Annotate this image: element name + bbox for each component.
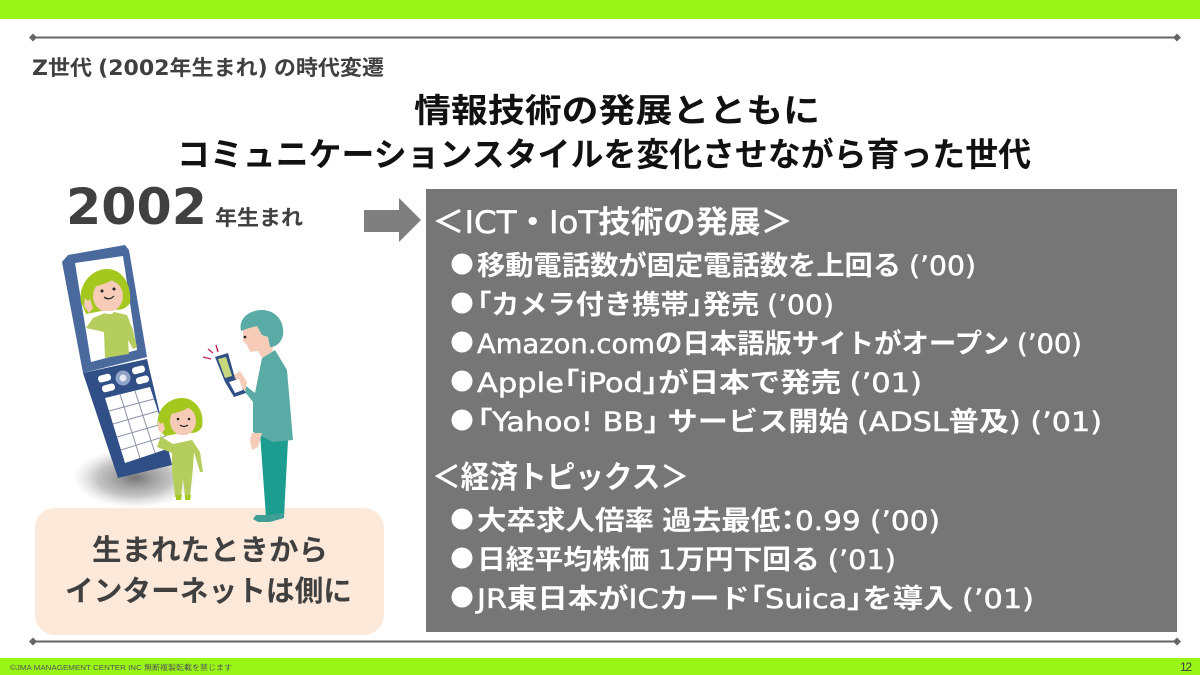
- top green bar: [0, 0, 1200, 19]
- section: ICT / IoT: Amazon.comの日本語版サイトがオープン (’00): [477, 328, 1082, 360]
- large flip phone: [62, 245, 172, 478]
- section: economy topics: 日経平均株価 1万円下回る (’01): [477, 545, 896, 576]
- section: economy topics: JR東日本が ICカード 「Suica 」を導入 (’01): [475, 583, 1034, 615]
- callout: born with the internet: インターネットは側に: [65, 575, 352, 608]
- callout: born with the internet: 生まれたときから: [92, 534, 328, 567]
- section: ICT / IoT: 移動電話数が固定電話数を上回る (’00): [477, 250, 976, 282]
- section: economy topics: ＜経済トピックス＞: [432, 460, 689, 495]
- copyright text: ©JMA MANAGEMENT CENTER INC 無断複製転載を禁じます: [10, 662, 232, 672]
- man holding phone: [233, 310, 293, 522]
- subheading: Z世代 (2002年生まれ) の時代変遷: [32, 56, 384, 80]
- section: ICT / IoT: 「カメラ付き携帯 」発売 (’00): [477, 290, 834, 321]
- title: 情報技術の発展とともに: [414, 92, 820, 129]
- birth year label: 2002: [66, 178, 207, 236]
- small phone in hand: [203, 345, 246, 397]
- panel: ICT and economy timeline: [426, 189, 1177, 632]
- bottom footer bar: [0, 658, 1200, 675]
- callout: born with the internet: [35, 508, 384, 635]
- section: ICT / IoT: Apple 「iPod 」が日本で発売 (’01): [477, 367, 922, 399]
- girl on phone screen: [81, 269, 137, 358]
- birth year label: [66, 178, 303, 236]
- section: economy topics: [432, 460, 1034, 615]
- title: コミュニケーションスタイルを変化させながら育った世代: [177, 136, 1031, 173]
- section: ICT / IoT: [432, 205, 1102, 438]
- phone shadow: [73, 448, 197, 508]
- illustration: flip phone with girl and man: [62, 245, 293, 522]
- title: [177, 92, 1031, 173]
- section: ICT / IoT: 「Yahoo! BB 」 サービス開始 (ADSL 普及) (’01): [477, 407, 1102, 438]
- small girl: [157, 398, 203, 500]
- arrow: [364, 198, 421, 242]
- section: ICT / IoT: ＜ICT・IoT技術の発展＞: [432, 205, 793, 241]
- section: economy topics: 大卒求人倍率 過去最低 ：0.99 (’00): [477, 506, 940, 537]
- birth year label: 年生まれ: [215, 207, 303, 230]
- page number: 12: [1180, 660, 1192, 674]
